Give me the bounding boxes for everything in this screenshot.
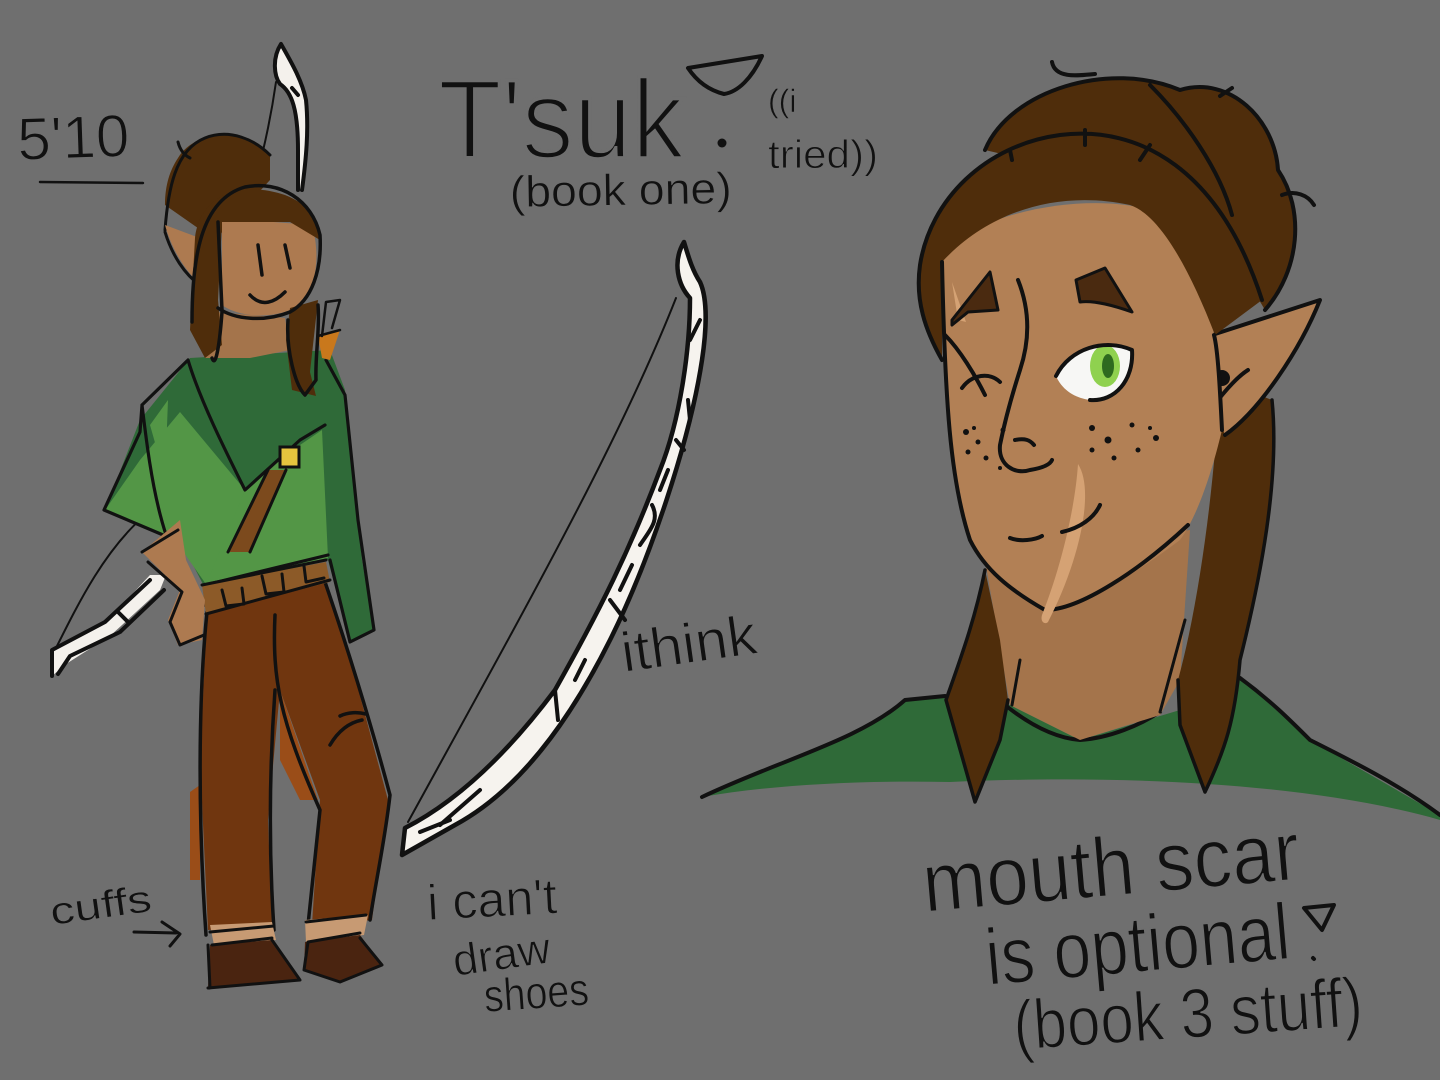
large bow illustration [402,242,706,855]
aside note [768,83,878,177]
portrait: shoulders [702,678,1440,820]
belt with pouches [202,560,330,614]
head with hair [190,186,320,396]
hair bun [165,134,270,285]
note: cuffs [47,878,180,946]
portrait: face [942,203,1222,610]
aside note: ((i [768,83,796,119]
note: shoes: shoes [482,963,590,1022]
portrait: nose and forelock [945,280,1052,471]
portrait: face outline [942,262,1222,610]
arrow to cuffs [134,922,180,946]
portrait: hair bun [985,78,1295,310]
portrait: back hair [945,380,1274,800]
strap and buckle [228,447,299,552]
note: shoes: i can't [426,868,558,931]
legs and trousers [190,582,390,935]
title triangle mark [688,56,762,94]
bowstring [408,298,676,822]
portrait: green eye [1056,345,1132,400]
triangle exclamation mark [1304,905,1334,959]
aside note: tried)) [768,133,878,177]
portrait: ear [1212,300,1320,435]
title: T'suk [438,57,685,182]
note: mouth scar is optional [918,803,1334,1002]
note: shoes: draw [450,924,554,986]
arm and hand on hip [142,520,205,645]
note: i think: ithink [617,602,761,684]
portrait: scar [1042,464,1085,623]
portrait: freckles [963,422,1159,470]
portrait: mouth [1010,505,1100,540]
portrait: closed eye [962,376,1000,388]
height label: 5'10 [16,102,130,173]
note: mouth scar is optional: mouth scar [918,803,1303,930]
full figure: character standing [52,44,390,988]
portrait of character [702,62,1440,820]
quiver [318,300,340,360]
subtitle: (book one) [509,164,732,217]
note: mouth scar is optional: is optional [982,887,1293,1002]
portrait: eyebrows [952,272,998,325]
note: book 3 stuff: (book 3 stuff) [1011,963,1365,1065]
portrait: hair front [917,134,1262,360]
note: cuffs: cuffs [47,878,154,934]
portrait: neck [985,530,1190,740]
neck [205,312,290,358]
green shirt [104,350,374,642]
small bow behind figure [52,44,307,676]
note: shoes [426,868,590,1022]
boots and cuffs [208,915,382,988]
